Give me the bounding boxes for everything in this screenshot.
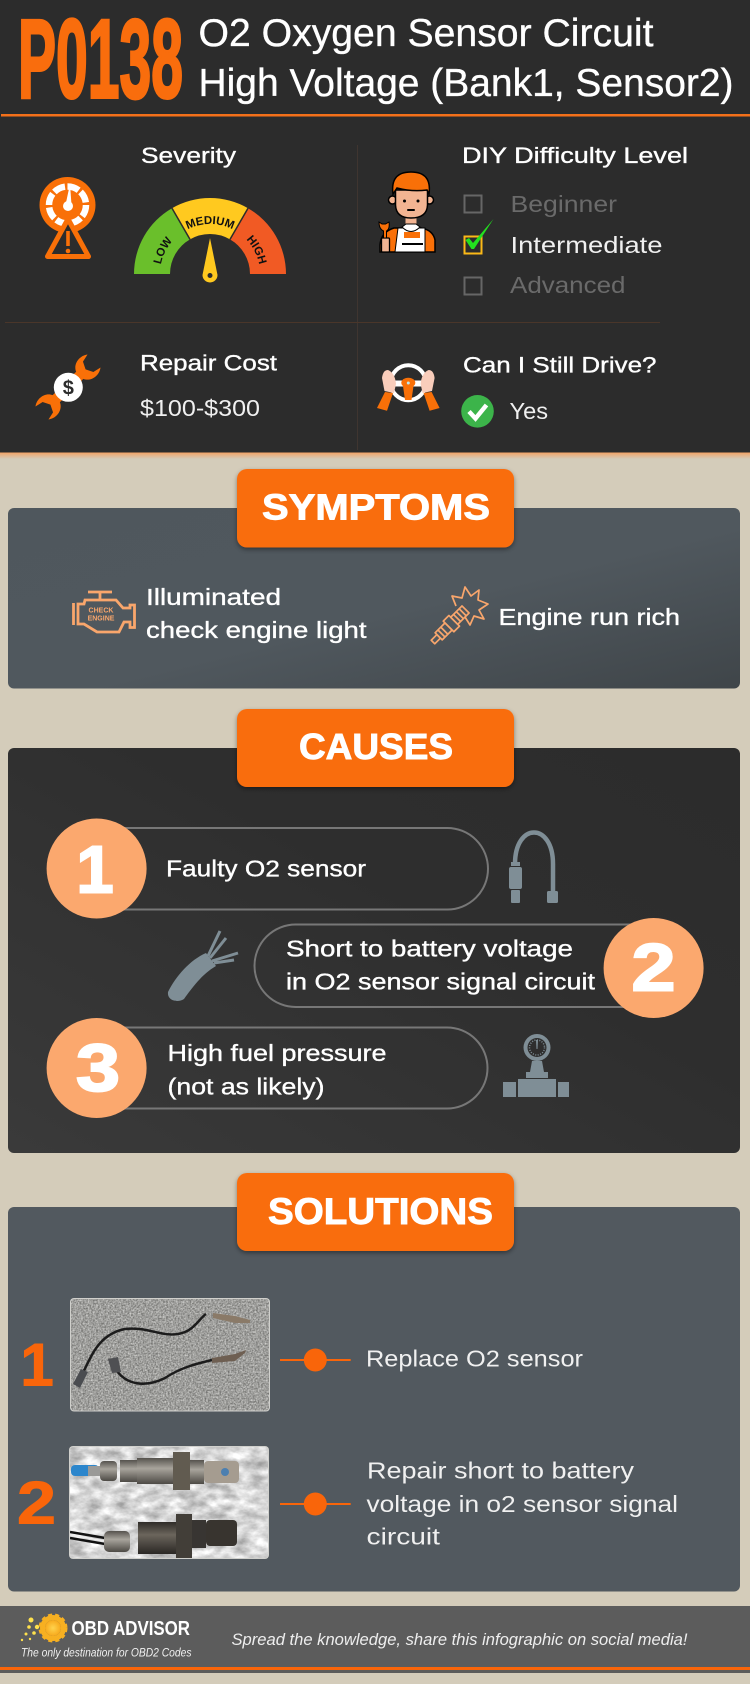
title: description: High Voltage (Bank1, Sensor2) xyxy=(198,62,734,105)
connector: solution 2 xyxy=(280,1492,351,1516)
title: code: P0138 xyxy=(18,0,183,122)
checklist: difficulty options xyxy=(464,191,662,298)
pill: cause 1 xyxy=(47,818,488,918)
icon: logo gear xyxy=(21,1615,66,1641)
pill: cause 3 xyxy=(47,1018,487,1118)
text: can I still drive: Can I Still Drive? xyxy=(463,352,656,378)
text: check engine light: check engine light xyxy=(146,617,367,643)
icon: hands on steering wheel xyxy=(377,365,440,411)
icon: check engine: ENGINE xyxy=(88,616,115,622)
share message: Spread the knowledge, share this infographic on social media! xyxy=(232,1630,688,1649)
text: solution 2: Repair short to battery xyxy=(367,1458,634,1484)
text: can I still drive: Yes xyxy=(510,398,548,424)
chart: severity gauge: HIGH xyxy=(246,234,267,264)
icon: wire bundle xyxy=(168,931,238,1001)
heading badge: causes: CAUSES xyxy=(299,726,453,767)
number: solution 2: 2 xyxy=(17,1470,56,1536)
pill: cause 2: Short to battery voltage xyxy=(286,936,573,962)
text: check engine light xyxy=(146,584,367,643)
icon: wrench with dollar: $ xyxy=(63,378,74,400)
heading badge: causes xyxy=(237,709,514,787)
checklist: difficulty options: Beginner xyxy=(510,191,617,217)
photo: replacement sensors on concrete xyxy=(70,1298,270,1412)
icon: spark plug xyxy=(428,587,488,647)
checklist: difficulty options: Advanced xyxy=(510,272,626,298)
panel: symptoms xyxy=(8,508,740,688)
panel: header and quick facts xyxy=(0,0,750,459)
pill: cause 2: 2 xyxy=(632,930,676,1006)
pill: cause 2 xyxy=(254,918,704,1018)
icon: check engine xyxy=(74,592,134,632)
chart: severity gauge: MEDIUM xyxy=(185,216,235,229)
text: repair cost xyxy=(140,350,278,421)
text: solution 2 xyxy=(366,1458,678,1550)
text: solution 2: circuit xyxy=(366,1524,441,1550)
text: repair cost: Repair Cost xyxy=(140,350,278,376)
heading: DIY difficulty: DIY Difficulty Level xyxy=(462,143,688,168)
icon: oxygen sensor xyxy=(509,832,558,903)
text: solution 1: Replace O2 sensor xyxy=(366,1346,583,1372)
icon: fuel pressure gauge xyxy=(503,1034,569,1097)
icon: check engine: CHECK xyxy=(89,608,113,614)
text: can I still drive xyxy=(461,352,656,428)
text: check engine light: Illuminated xyxy=(146,584,281,610)
icon: gauge with warning triangle xyxy=(40,177,96,256)
pill: cause 3: 3 xyxy=(76,1031,120,1106)
text: repair cost: $100-$300 xyxy=(140,395,260,421)
photo: two sensors on paper xyxy=(69,1446,269,1561)
pill: cause 2: in O2 sensor signal circuit xyxy=(286,968,596,994)
pill: cause 3: High fuel pressure xyxy=(168,1040,386,1066)
logo wordmark: OBD ADVISOR xyxy=(72,1618,190,1640)
text: solution 2: voltage in o2 sensor signal xyxy=(366,1491,678,1517)
text: engine run rich: Engine run rich xyxy=(498,604,680,630)
connector: solution 1 xyxy=(280,1348,351,1372)
logo tagline: The only destination for OBD2 Codes xyxy=(21,1646,192,1660)
title: description xyxy=(198,12,734,105)
heading badge: solutions xyxy=(237,1173,514,1251)
panel: causes xyxy=(8,748,740,1153)
heading badge: symptoms xyxy=(237,469,514,548)
checklist: difficulty options: Intermediate xyxy=(510,232,662,258)
icon: mechanic xyxy=(379,172,435,252)
chart: severity gauge xyxy=(134,198,286,282)
pill: cause 1: Faulty O2 sensor xyxy=(166,856,366,882)
footer xyxy=(0,1606,750,1673)
title: description: O2 Oxygen Sensor Circuit xyxy=(198,12,654,55)
panel: solutions xyxy=(8,1207,740,1592)
number: solution 1: 1 xyxy=(20,1332,54,1398)
heading badge: solutions: SOLUTIONS xyxy=(268,1191,493,1232)
pill: cause 3: (not as likely) xyxy=(168,1074,324,1100)
heading badge: symptoms: SYMPTOMS xyxy=(262,486,490,528)
chart: severity gauge: LOW xyxy=(153,236,172,264)
icon: wrench with dollar xyxy=(33,352,103,422)
heading: severity: Severity xyxy=(141,143,237,168)
pill: cause 1: 1 xyxy=(76,832,114,908)
